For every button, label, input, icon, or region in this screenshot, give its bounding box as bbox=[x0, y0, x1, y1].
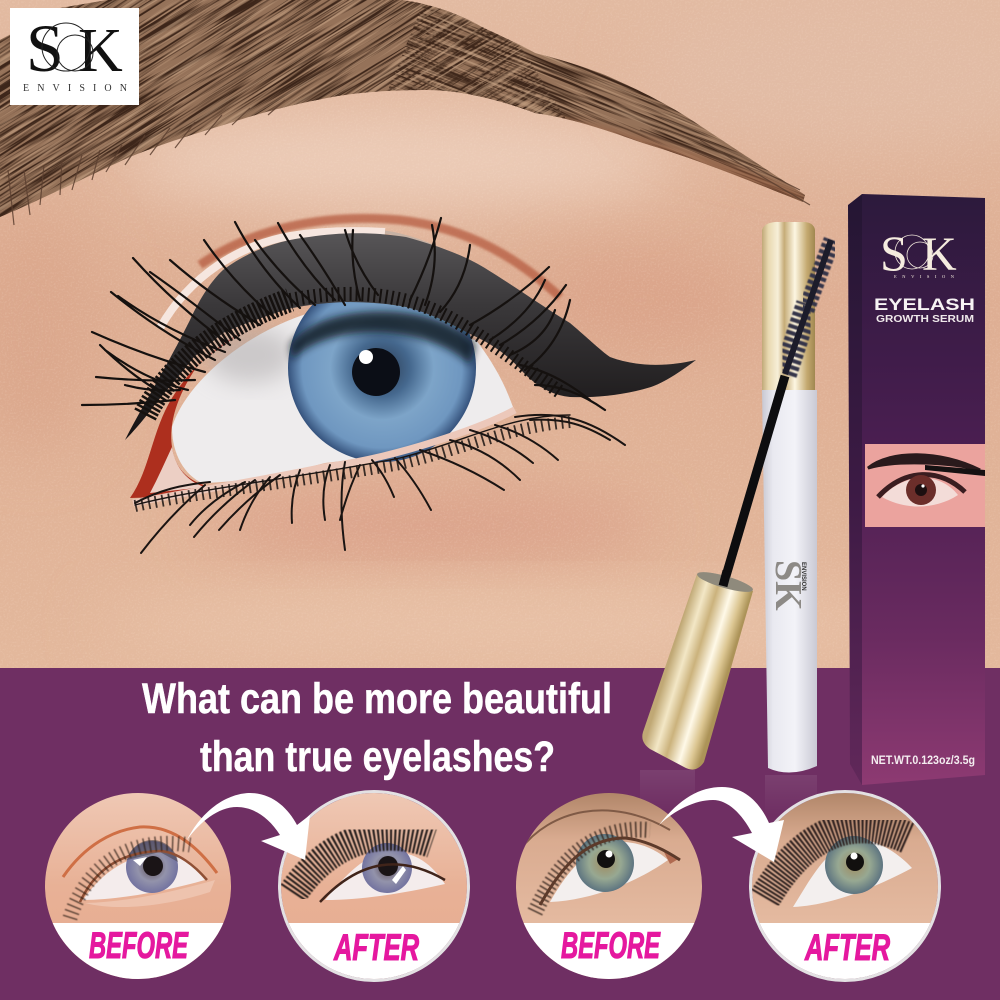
photo: close-up of eye on skin bbox=[0, 0, 1000, 668]
arrow 1 bbox=[187, 793, 310, 860]
brow hair tips bbox=[8, 100, 810, 225]
after circle 1 bbox=[270, 792, 470, 983]
eye: lower lid rim bbox=[133, 410, 515, 503]
eye: sclera bbox=[172, 313, 513, 483]
tube logo: SK bbox=[767, 560, 809, 611]
eye photo 4 bbox=[752, 820, 930, 979]
label after 1: AFTER bbox=[333, 927, 419, 968]
box subtitle: GROWTH SERUM bbox=[876, 314, 974, 325]
box title: EYELASH bbox=[874, 295, 975, 314]
eye: red inner lid bbox=[130, 330, 245, 498]
eye photo 2 bbox=[270, 836, 470, 983]
logo rings bbox=[42, 23, 93, 71]
box net weight: NET.WT.0.123oz/3.5g bbox=[871, 755, 975, 767]
box logo: K bbox=[922, 228, 957, 281]
gold collar bbox=[762, 222, 815, 390]
box logo: S bbox=[880, 225, 908, 281]
cap opening bbox=[695, 568, 755, 596]
brush bristles bbox=[785, 304, 808, 374]
logo badge: K bbox=[78, 17, 123, 85]
after circle 2 bbox=[740, 792, 950, 983]
mascara wand and brush bbox=[723, 240, 832, 586]
heading bbox=[142, 675, 612, 781]
eye: lower lashes bbox=[135, 415, 625, 553]
logo wordmark: ENVISION bbox=[23, 83, 127, 94]
eye: white liner stripe bbox=[160, 231, 385, 328]
wand rod bbox=[723, 376, 785, 586]
ring bbox=[750, 792, 940, 980]
box side bbox=[848, 194, 862, 785]
mascara tube bbox=[762, 222, 817, 773]
white tube body bbox=[762, 390, 817, 773]
eye photo 3 bbox=[524, 809, 694, 979]
eyebrow bbox=[0, 0, 810, 226]
eye: grey liner stripe bbox=[384, 230, 557, 315]
before circle 1 bbox=[40, 793, 240, 983]
label before 1: BEFORE bbox=[89, 925, 189, 966]
label after 2: AFTER bbox=[804, 927, 890, 968]
ring bbox=[280, 792, 468, 980]
logo letters: S bbox=[26, 10, 64, 86]
floor reflections bbox=[640, 770, 817, 815]
heading: What can be more beautiful bbox=[142, 675, 612, 723]
eye: red crease above lid bbox=[200, 218, 560, 297]
heading: than true eyelashes? bbox=[200, 733, 555, 781]
eye: lower lash clumps bbox=[135, 422, 570, 506]
before circle 2 bbox=[516, 793, 702, 979]
arrow 2 bbox=[659, 787, 784, 862]
tube logo: ENVISION bbox=[800, 562, 806, 591]
eye: blue iris and pupil bbox=[284, 302, 481, 462]
skin grain bbox=[0, 195, 1000, 566]
box logo bbox=[880, 225, 957, 281]
eye: upper lashes bbox=[82, 218, 605, 410]
box logo: ENVISION bbox=[894, 274, 955, 279]
box front bbox=[862, 194, 985, 785]
box eye picture bbox=[865, 444, 985, 527]
eye photo 1 bbox=[52, 825, 224, 979]
eye: pale tear corner bbox=[150, 447, 205, 493]
eye: black winged eyeliner bbox=[125, 233, 696, 440]
eye: lash mass at lid edge bbox=[145, 294, 560, 415]
label before 2: BEFORE bbox=[561, 925, 661, 966]
mascara gold cap bbox=[642, 568, 755, 770]
product box bbox=[848, 194, 985, 785]
logo badge bbox=[10, 8, 139, 105]
